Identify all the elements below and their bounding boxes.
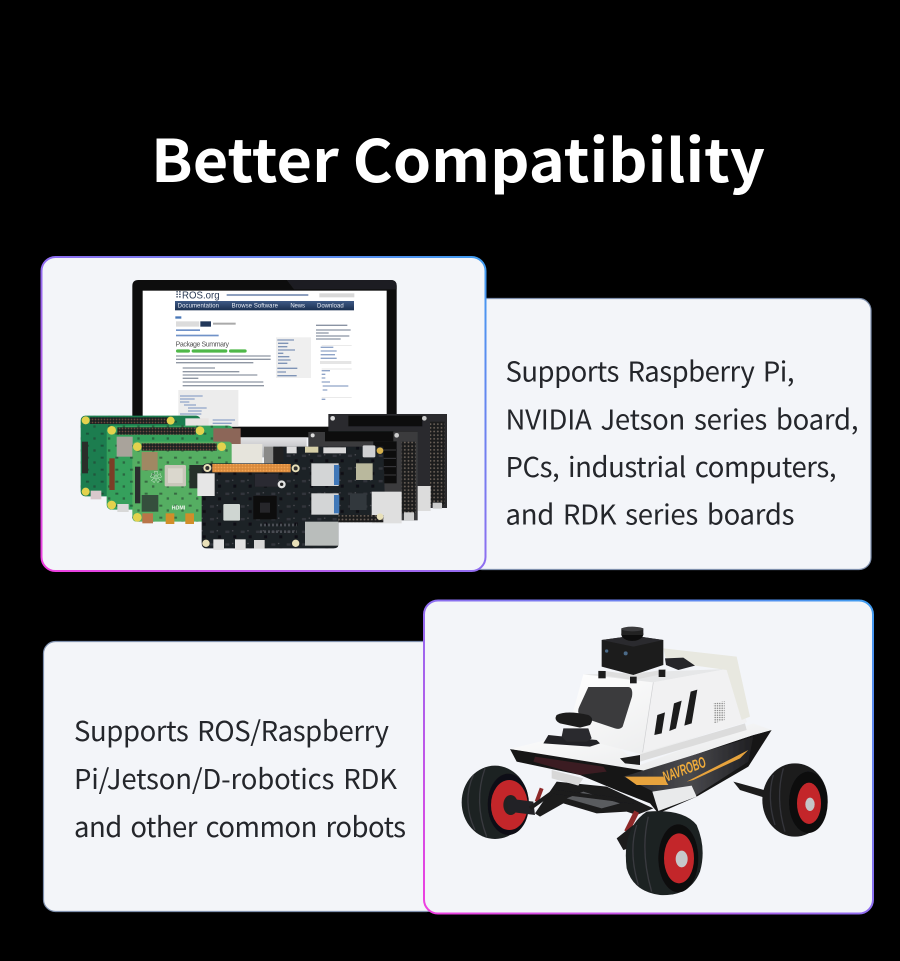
icon: Raspberry Pi front board: [132, 442, 275, 524]
panel: robot image: [424, 600, 873, 914]
icon: monitor: [132, 280, 397, 457]
icon: RDK board: [197, 445, 402, 550]
illustration: monitor and boards: [81, 280, 447, 550]
icon: chassis and suspension: NAVROBO: [660, 754, 708, 786]
icon: front sensor: [543, 712, 600, 747]
ROS web page: [175, 291, 354, 427]
text block: supported boards: [506, 350, 858, 532]
icon: Raspberry Pi middle board: [107, 426, 241, 512]
text block: supported systems: [74, 709, 406, 845]
icon: Jetson boards: [308, 414, 447, 520]
ROS web page: News: [290, 304, 305, 310]
panel: board compatibility text: [470, 298, 871, 570]
text block: supported systems: Supports ROS/Raspberry: [74, 709, 389, 749]
icon: front left wheel: [462, 766, 633, 839]
icon: front right wheel: [617, 811, 703, 895]
ROS web page: Download: [317, 304, 344, 310]
title: Better Compatibility: [151, 114, 765, 199]
panel: controller boards image: [42, 257, 486, 571]
icon: Raspberry Pi front board: HDMI: [172, 505, 186, 511]
text block: supported boards: PCs, industrial computers,: [506, 445, 836, 485]
text block: supported systems: and other common robots: [74, 805, 406, 845]
illustration: robot car: [462, 627, 828, 895]
ROS web page: Browse Software: [232, 304, 279, 310]
ROS web page: Documentation: [178, 304, 219, 310]
text block: supported systems: Pi/Jetson/D-robotics RDK: [74, 757, 397, 797]
icon: Raspberry Pi back board: [81, 416, 209, 499]
ROS web page: Package Summary: [176, 342, 229, 349]
panel: robot compatibility text: [44, 642, 438, 912]
text block: supported boards: NVIDIA Jetson series board,: [506, 398, 858, 438]
icon: chassis and suspension: [510, 723, 772, 832]
text block: supported boards: Supports Raspberry Pi,: [506, 350, 794, 390]
icon: depth camera: [598, 627, 695, 683]
text block: supported boards: and RDK series boards: [506, 492, 794, 532]
icon: Raspberry Pi front board: ❀: [150, 471, 162, 485]
icon: robot body shell: [567, 648, 750, 765]
icon: rear right wheel: [733, 763, 828, 837]
ROS web page: ⠿ROS.org: [175, 291, 220, 302]
